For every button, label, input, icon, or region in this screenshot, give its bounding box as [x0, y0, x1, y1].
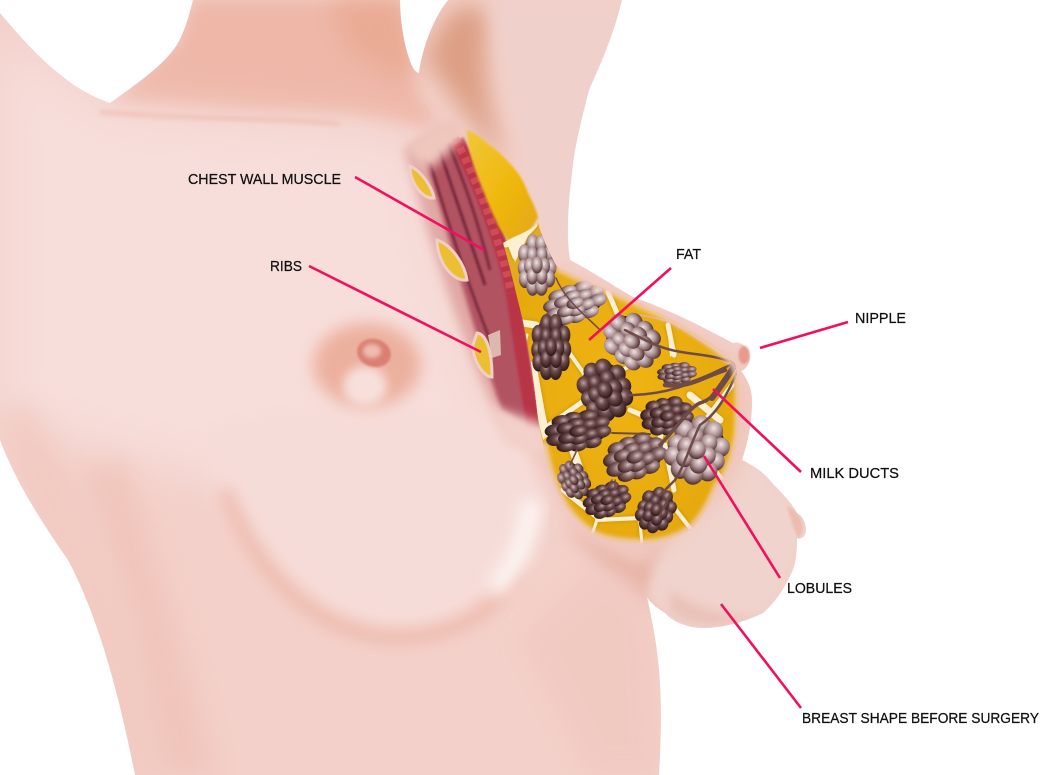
line: ribs	[309, 266, 481, 352]
rib 3	[473, 333, 492, 377]
cutaway breast interior	[495, 215, 745, 550]
areola and nipple of intact side	[313, 323, 421, 407]
label: ribs: RIBS	[270, 259, 302, 275]
pale upper ducts	[640, 315, 735, 362]
label: nipple: NIPPLE	[855, 311, 906, 327]
milk ducts	[556, 278, 738, 515]
label: chest wall muscle: CHEST WALL MUSCLE	[188, 172, 341, 188]
soft skin fade at the cut edge	[543, 267, 739, 543]
line: milk ducts	[713, 389, 801, 472]
rib 2	[437, 240, 467, 280]
torso with arm and pre-surgery breast outline	[0, 0, 806, 775]
seam shadow	[506, 225, 735, 545]
line: nipple	[760, 322, 848, 348]
upper fat pad	[467, 130, 538, 243]
callout lines	[309, 177, 848, 708]
label: milk ducts: MILK DUCTS	[810, 466, 899, 482]
rib 1	[410, 166, 434, 198]
label: breast shape before surgery: BREAST SHAPE BEFORE SURGERY	[802, 711, 1039, 727]
connective tissue seams	[503, 223, 735, 545]
line: breast shape	[721, 604, 801, 708]
line: chest wall muscle	[355, 177, 484, 250]
nipple on cutaway side	[738, 346, 750, 364]
chest wall muscle	[405, 120, 545, 455]
label: lobules: LOBULES	[787, 581, 852, 597]
line: fat	[589, 268, 671, 340]
line: lobules	[704, 456, 780, 578]
label: fat: FAT	[676, 247, 701, 263]
lobule clusters	[518, 234, 739, 539]
ribs	[410, 166, 492, 377]
